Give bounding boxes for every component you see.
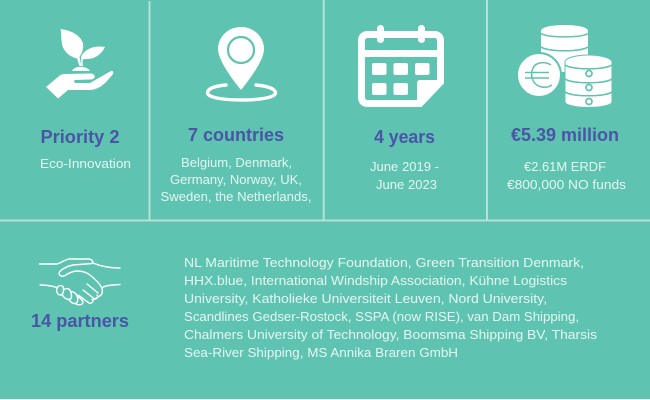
heading: 4 years: 4 years	[374, 127, 435, 147]
panel: partners	[31, 255, 597, 360]
panel: duration	[361, 25, 444, 192]
icon: euro coin and coin stacks	[517, 25, 612, 108]
text: partner list	[184, 255, 597, 360]
text: country list: Germany, Norway, UK,	[170, 172, 302, 187]
text: dates: June 2019 -	[370, 159, 439, 174]
icon: hand holding plant	[46, 29, 113, 98]
text: country list: Belgium, Denmark,	[181, 155, 292, 170]
text: funding breakdown: €2.61M ERDF	[524, 159, 606, 174]
heading: 14 partners: 14 partners	[31, 311, 129, 331]
text: country list	[160, 155, 312, 204]
panel: countries	[160, 27, 312, 204]
heading: Priority 2: Priority 2	[40, 127, 120, 147]
text: dates: June 2023	[376, 177, 437, 192]
text: partner list: Scandlines Gedser-Rostock, SSPA (now RISE), van Dam Shipping,	[184, 309, 579, 324]
icon: calendar	[361, 25, 444, 107]
panel: priority	[40, 29, 131, 171]
text: funding breakdown	[507, 159, 626, 192]
icon: map pin	[208, 27, 276, 100]
text: dates	[370, 159, 439, 192]
text: country list: Sweden, the Netherlands,	[160, 189, 312, 204]
text: funding breakdown: €800,000 NO funds	[507, 177, 626, 192]
text: partner list: Chalmers University of Technology, Boomsma Shipping BV, Tharsis	[184, 327, 597, 342]
text: partner list: NL Maritime Technology Foundation, Green Transition Denmark,	[184, 255, 584, 270]
heading: 7 countries: 7 countries	[188, 125, 284, 145]
heading: 5.39 million euros: €5.39 million	[511, 125, 619, 145]
text: partner list: HHX.blue, International Windship Association, Kühne Logistics	[184, 273, 567, 288]
text: Eco-Innovation: Eco-Innovation	[40, 156, 131, 171]
text: partner list: University, Katholieke Universiteit Leuven, Nord University,	[184, 291, 547, 306]
text: partner list: Sea-River Shipping, MS Annika Braren GmbH	[184, 345, 458, 360]
panel: budget	[507, 25, 626, 192]
icon: handshake	[40, 259, 120, 305]
